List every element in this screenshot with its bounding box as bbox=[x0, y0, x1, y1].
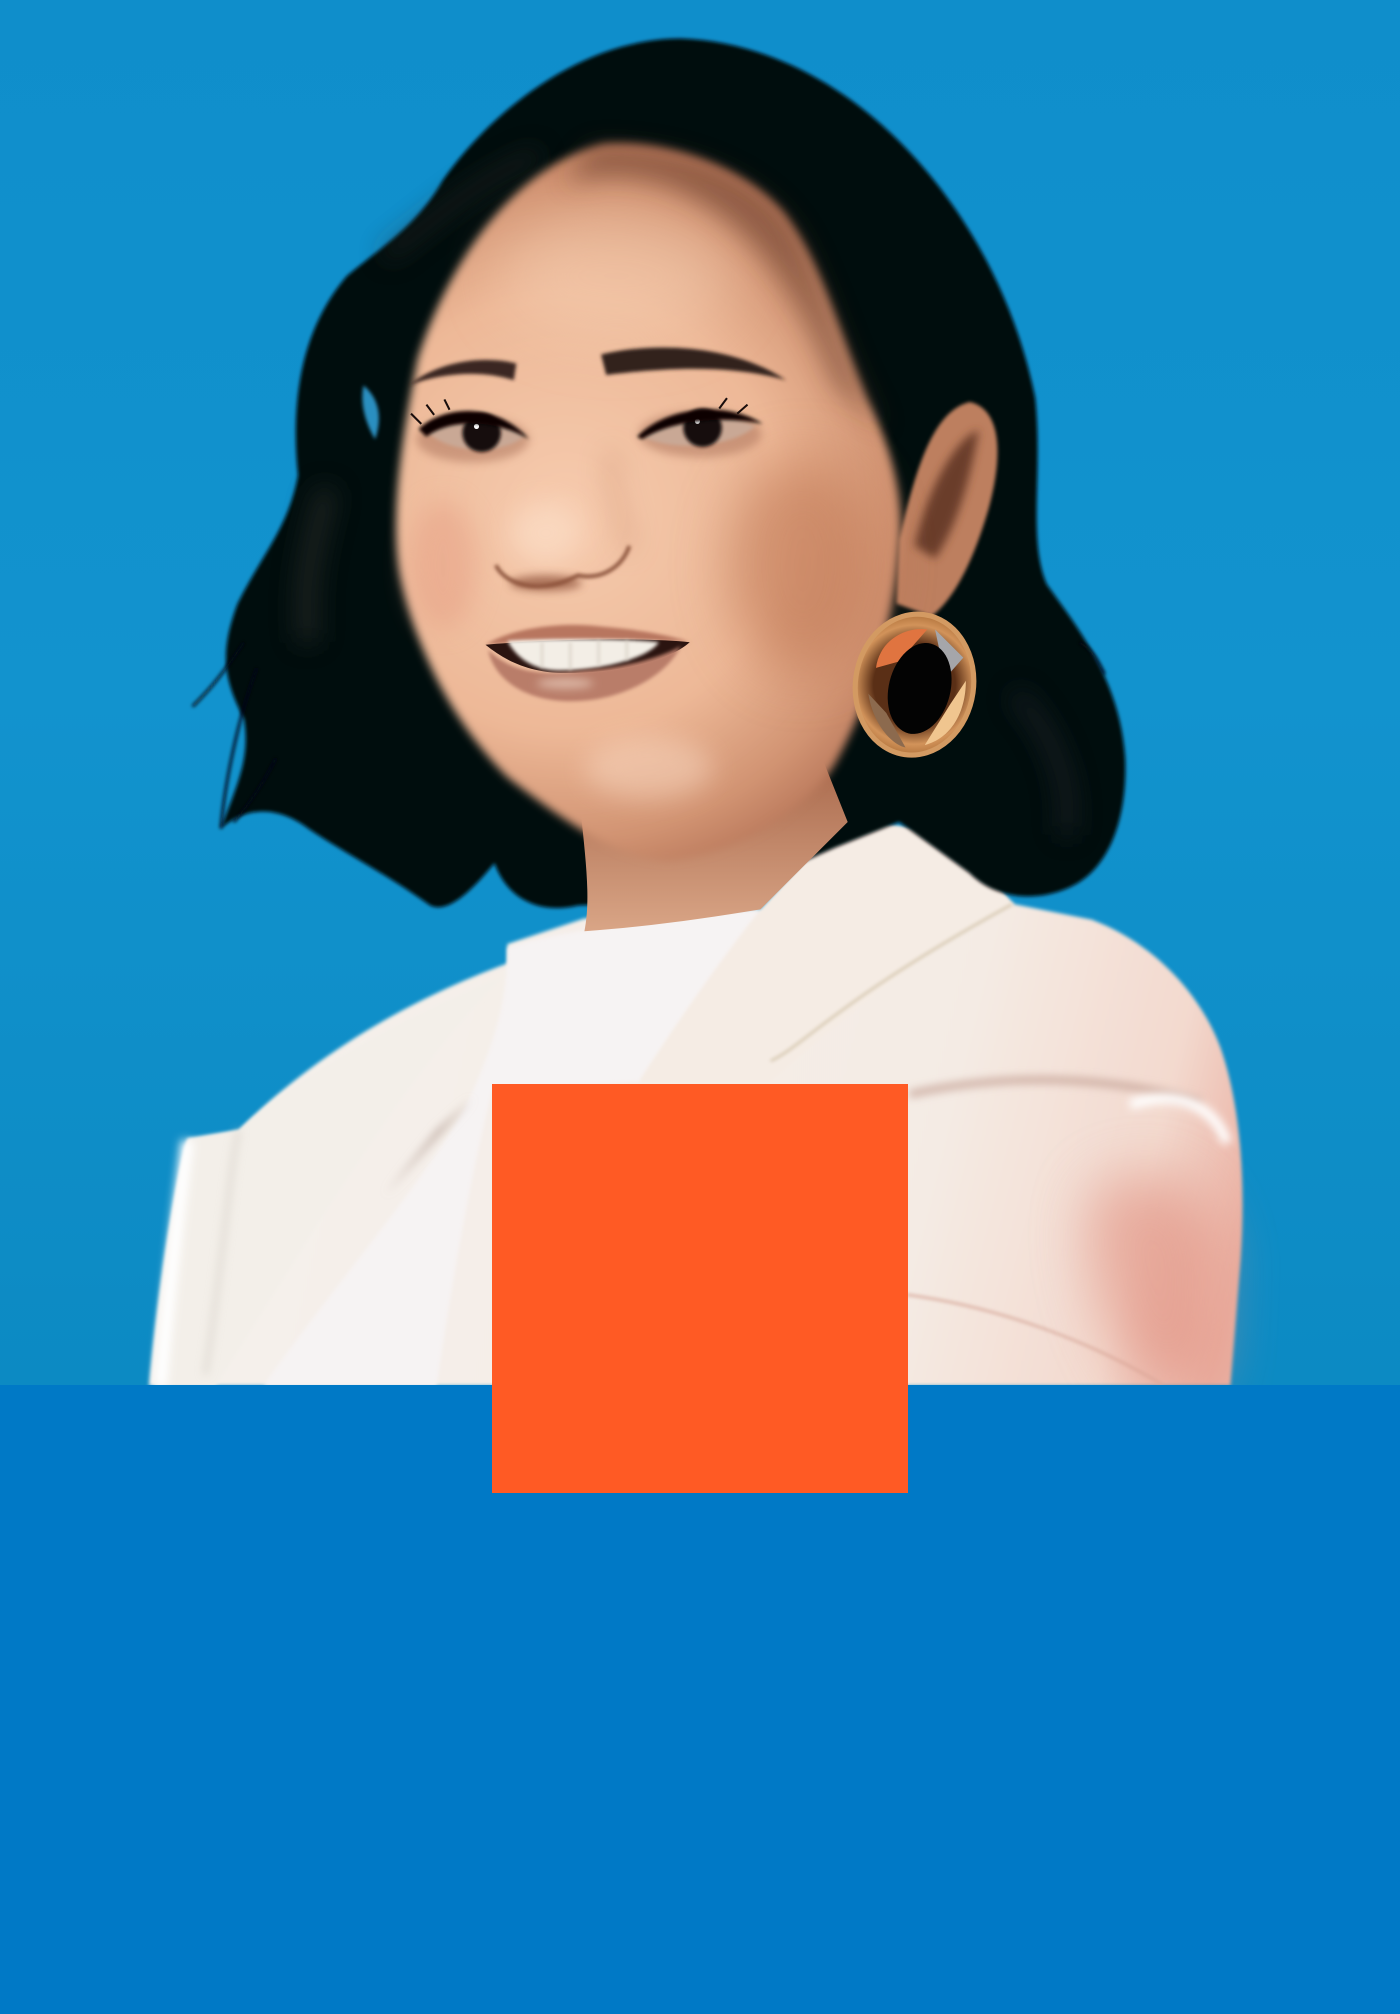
right lapel bbox=[640, 822, 1012, 1081]
stray hair strands bbox=[193, 642, 1105, 828]
left eyebrow bbox=[408, 360, 516, 385]
portrait photo: woman on blue background bbox=[0, 0, 1400, 1385]
forehead highlight bbox=[501, 212, 732, 340]
blue studio backdrop bbox=[0, 0, 1400, 1386]
gold hoop earring bbox=[846, 606, 983, 763]
blue lower band bbox=[0, 1385, 1400, 2014]
jacket bbox=[149, 822, 1243, 1386]
right eyebrow bbox=[601, 347, 786, 380]
teeth bbox=[507, 639, 659, 670]
blue gap in hair bbox=[362, 385, 379, 439]
mouth bbox=[486, 625, 690, 701]
forehead hair shadow bbox=[565, 147, 886, 430]
left eye bbox=[411, 399, 529, 462]
jacket fold shadows bbox=[909, 1080, 1201, 1102]
upper lip bbox=[486, 625, 690, 645]
orange square bbox=[492, 1084, 908, 1493]
right eye bbox=[637, 398, 763, 457]
chin highlight bbox=[584, 737, 713, 799]
white shirt bbox=[263, 909, 760, 1386]
nose bbox=[496, 450, 629, 591]
neck bbox=[581, 758, 848, 931]
ear bbox=[897, 402, 997, 617]
left lapel bbox=[154, 976, 503, 1386]
hair highlights bbox=[307, 488, 328, 642]
face bbox=[396, 143, 901, 861]
hair bbox=[193, 39, 1125, 908]
cheek blush bbox=[728, 456, 877, 674]
lower lip bbox=[488, 646, 681, 701]
